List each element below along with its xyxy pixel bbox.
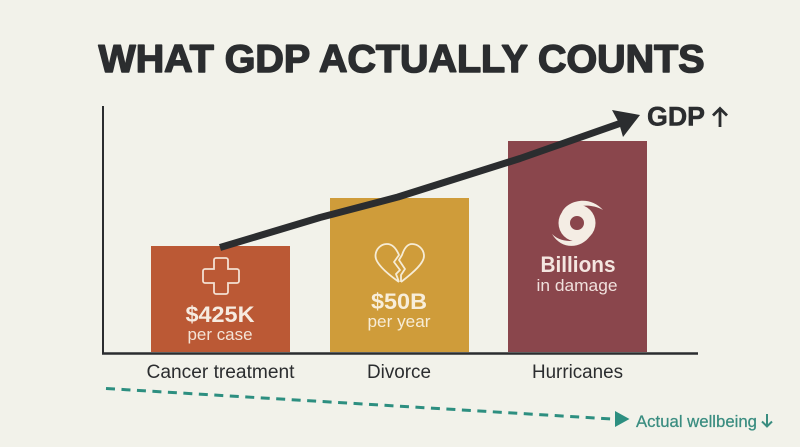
caption: per year: per year	[368, 312, 431, 331]
value: Billions: Billions	[540, 252, 616, 277]
icon: down arrow	[762, 414, 772, 426]
arrow: wellbeing declining	[106, 388, 630, 427]
caption: per case: per case	[188, 325, 252, 344]
value: $425K: $425K	[186, 302, 255, 327]
label: GDP up: GDP	[647, 102, 705, 132]
label: Divorce: Divorce	[367, 362, 431, 383]
value: $50B: $50B	[371, 289, 427, 314]
bar: cancer treatment	[151, 246, 290, 352]
caption: in damage: in damage	[536, 276, 618, 295]
icon: broken heart	[376, 244, 424, 282]
label: Hurricanes: Hurricanes	[532, 362, 623, 383]
icon: medical cross	[203, 258, 239, 294]
bar: hurricanes	[508, 141, 647, 352]
title: WHAT GDP ACTUALLY COUNTS	[98, 38, 704, 81]
icon: hurricane	[552, 201, 603, 246]
label: Cancer treatment: Cancer treatment	[146, 362, 295, 383]
chart axes	[102, 106, 698, 354]
bar: divorce	[330, 198, 469, 352]
icon: up arrow	[713, 108, 727, 127]
arrow: GDP rising	[220, 110, 640, 248]
label: Actual wellbeing down: Actual wellbeing	[636, 412, 757, 431]
